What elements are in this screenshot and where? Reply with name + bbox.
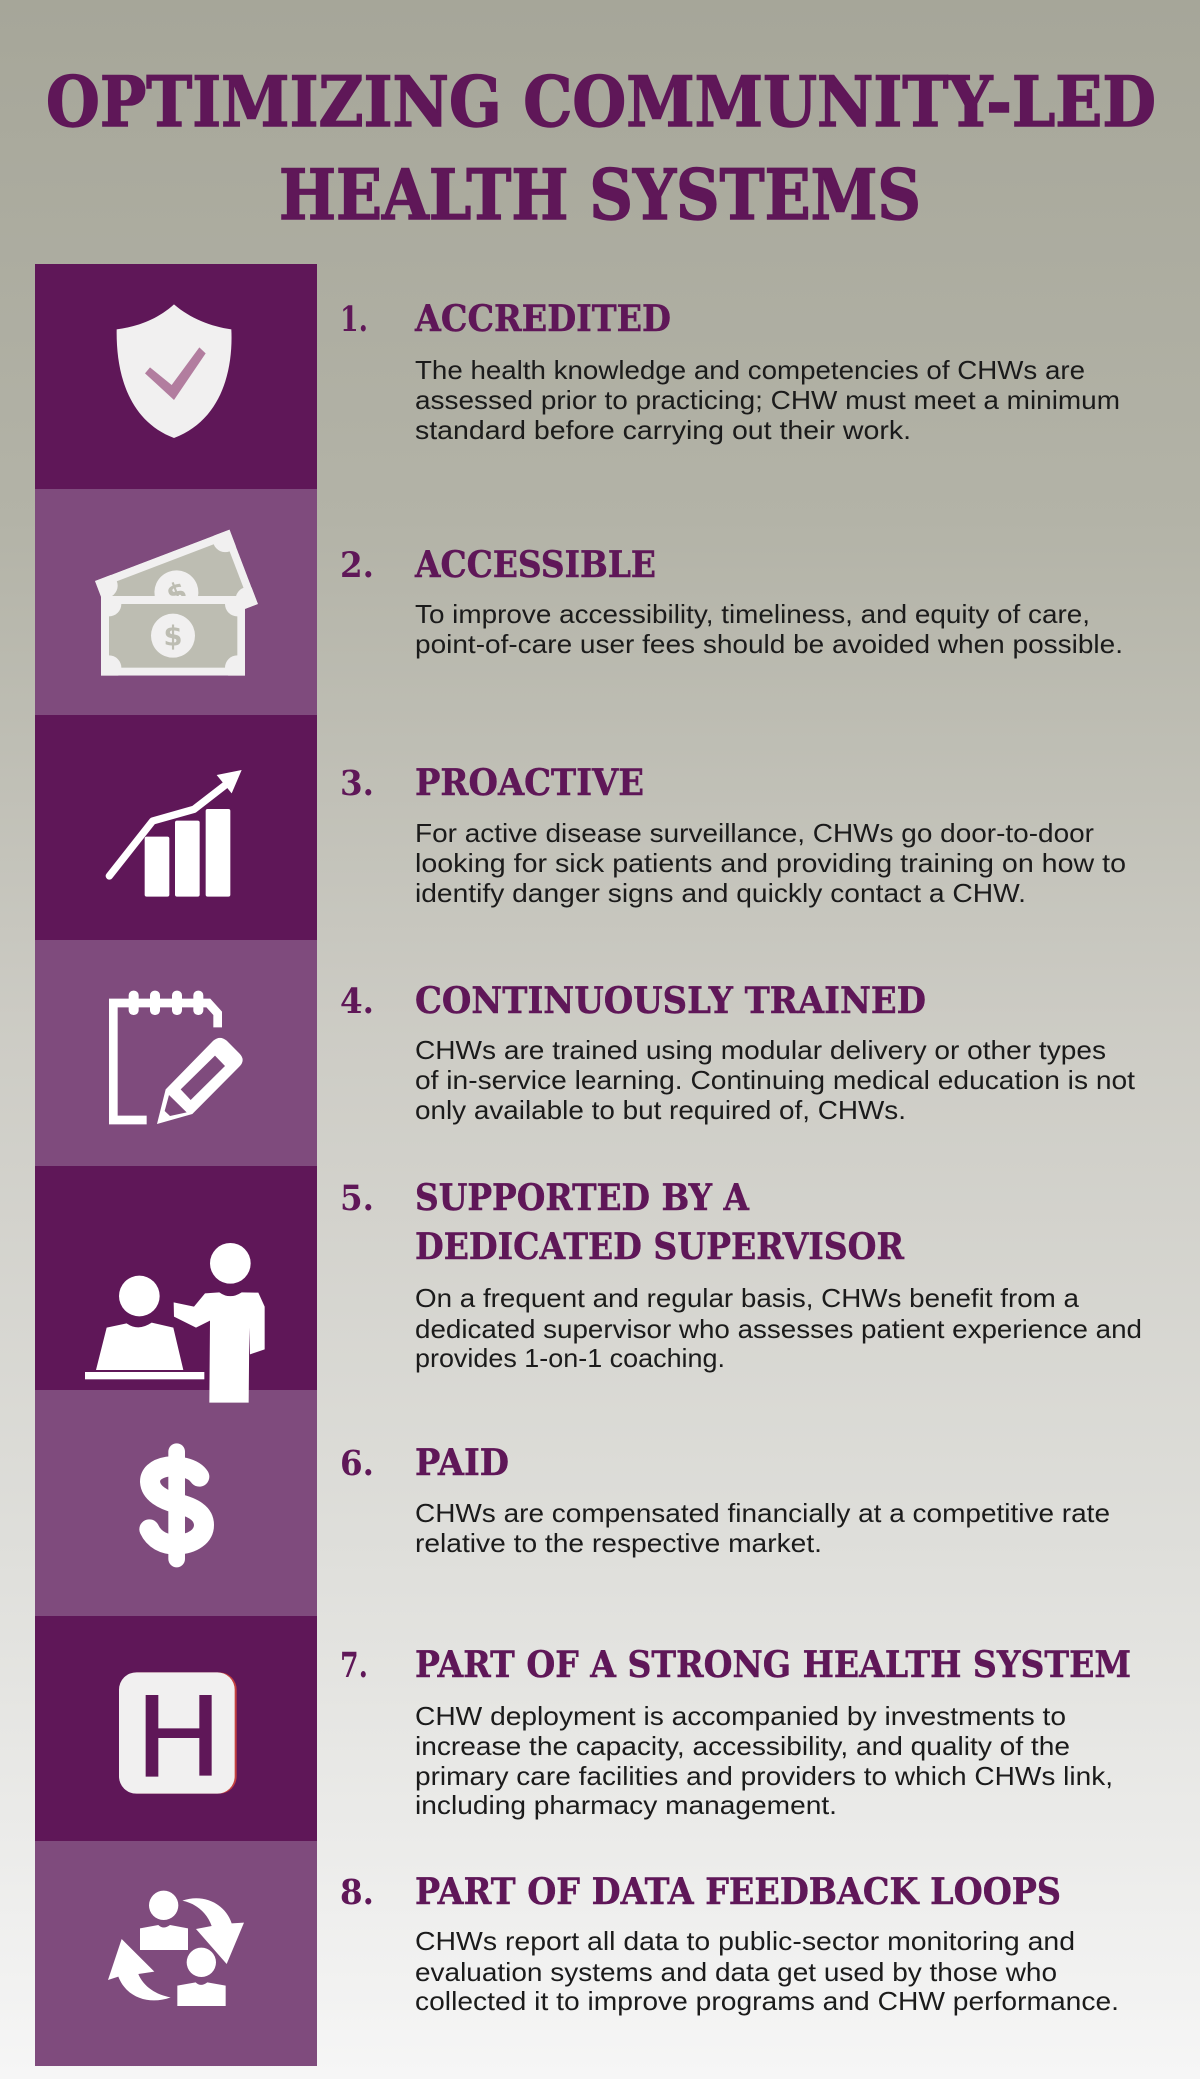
icon: shield with check bbox=[117, 304, 232, 438]
description 3: looking for sick patients and providing training on how to bbox=[415, 848, 1126, 878]
icon: hospital H sign bbox=[119, 1672, 237, 1794]
panel: 5 supported by a dedicated supervisor bbox=[35, 1166, 1142, 1403]
icon: dollar sign bbox=[149, 1452, 204, 1559]
icon: people exchanging data in a loop bbox=[108, 1891, 244, 2006]
heading: accredited: ACCREDITED bbox=[414, 298, 671, 340]
description 5: On a frequent and regular basis, CHWs benefit from a bbox=[415, 1283, 1080, 1313]
description 5 bbox=[415, 1283, 1142, 1373]
panel: 2 accessible bbox=[35, 489, 1123, 715]
description 1: standard before carrying out their work. bbox=[415, 415, 911, 445]
description 8: CHWs report all data to public-sector monitoring and bbox=[415, 1926, 1075, 1956]
description 3: For active disease surveillance, CHWs go door-to-door bbox=[415, 818, 1094, 848]
description 7: primary care facilities and providers to which CHWs link, bbox=[415, 1761, 1113, 1791]
description 6: CHWs are compensated financially at a competitive rate bbox=[415, 1498, 1110, 1528]
icon tile 1 bbox=[35, 264, 317, 489]
description 1: assessed prior to practicing; CHW must meet a minimum bbox=[415, 385, 1120, 415]
panel: 3 proactive bbox=[35, 715, 1126, 940]
icon tile 3 bbox=[35, 715, 317, 940]
icon tile 6 bbox=[35, 1390, 317, 1616]
heading: part of a strong health system: PART OF A STRONG HEALTH SYSTEM bbox=[415, 1644, 1131, 1686]
title bbox=[46, 62, 1156, 236]
description 2 bbox=[415, 599, 1123, 659]
description 1 bbox=[415, 355, 1120, 445]
heading: proactive: PROACTIVE bbox=[415, 762, 644, 804]
icon: banknotes: $ bbox=[163, 576, 191, 612]
description 6: relative to the respective market. bbox=[415, 1528, 822, 1558]
heading: continuously trained: CONTINUOUSLY TRAINED bbox=[415, 980, 926, 1022]
heading: supported by a dedicated supervisor: SUPPORTED BY A bbox=[415, 1177, 750, 1219]
description 7: increase the capacity, accessibility, and quality of the bbox=[415, 1731, 1070, 1761]
icon tile 5 bbox=[35, 1166, 317, 1390]
panel: 7 part of a strong health system bbox=[35, 1616, 1131, 1841]
panel: 6 paid bbox=[35, 1390, 1110, 1616]
icon tile 4 bbox=[35, 940, 317, 1166]
number 4: 4. bbox=[340, 981, 374, 1022]
description 4 bbox=[415, 1035, 1136, 1125]
icon tile 8 bbox=[35, 1841, 317, 2066]
title: HEALTH SYSTEMS bbox=[279, 155, 921, 236]
description 8: evaluation systems and data get used by those who bbox=[415, 1957, 1057, 1987]
number 5: 5. bbox=[340, 1178, 374, 1219]
description 4: of in-service learning. Continuing medical education is not bbox=[415, 1065, 1136, 1095]
description 5: provides 1-on-1 coaching. bbox=[415, 1343, 725, 1373]
number 1: 1. bbox=[340, 299, 368, 340]
heading: supported by a dedicated supervisor: DEDICATED SUPERVISOR bbox=[415, 1226, 905, 1268]
description 2: To improve accessibility, timeliness, and equity of care, bbox=[415, 599, 1090, 629]
description 6 bbox=[415, 1498, 1110, 1558]
panel: 1 accredited bbox=[35, 264, 1120, 489]
description 8 bbox=[415, 1926, 1119, 2016]
description 3: identify danger signs and quickly contact a CHW. bbox=[415, 878, 1026, 908]
description 4: CHWs are trained using modular delivery or other types bbox=[415, 1035, 1106, 1065]
description 7 bbox=[415, 1701, 1113, 1820]
number 2: 2. bbox=[340, 545, 374, 586]
icon: supervisor and seated worker bbox=[85, 1243, 265, 1403]
icon tile 2 bbox=[35, 489, 317, 715]
panel: 8 part of data feedback loops bbox=[35, 1841, 1119, 2066]
number 6: 6. bbox=[340, 1443, 374, 1484]
icon: rising bar chart bbox=[109, 770, 242, 897]
description 3 bbox=[415, 818, 1126, 908]
heading: part of data feedback loops: PART OF DATA FEEDBACK LOOPS bbox=[415, 1871, 1061, 1913]
description 2: point-of-care user fees should be avoided when possible. bbox=[415, 629, 1123, 659]
heading: supported by a dedicated supervisor bbox=[415, 1177, 905, 1268]
description 5: dedicated supervisor who assesses patient experience and bbox=[415, 1314, 1142, 1344]
description 8: collected it to improve programs and CHW performance. bbox=[415, 1986, 1119, 2016]
description 1: The health knowledge and competencies of CHWs are bbox=[415, 355, 1085, 385]
heading: paid: PAID bbox=[415, 1442, 509, 1484]
icon: banknotes bbox=[95, 530, 258, 676]
description 7: CHW deployment is accompanied by investments to bbox=[415, 1701, 1066, 1731]
icon tile 7 bbox=[35, 1616, 317, 1841]
description 7: including pharmacy management. bbox=[415, 1790, 837, 1820]
panel: 4 continuously trained bbox=[35, 940, 1136, 1166]
icon: banknotes: $ bbox=[163, 622, 183, 653]
description 4: only available to but required of, CHWs. bbox=[415, 1095, 906, 1125]
number 8: 8. bbox=[340, 1872, 374, 1913]
heading: accessible: ACCESSIBLE bbox=[414, 544, 656, 586]
icon: notepad and pencil bbox=[113, 991, 243, 1124]
number 7: 7. bbox=[340, 1645, 368, 1686]
number 3: 3. bbox=[340, 763, 374, 804]
